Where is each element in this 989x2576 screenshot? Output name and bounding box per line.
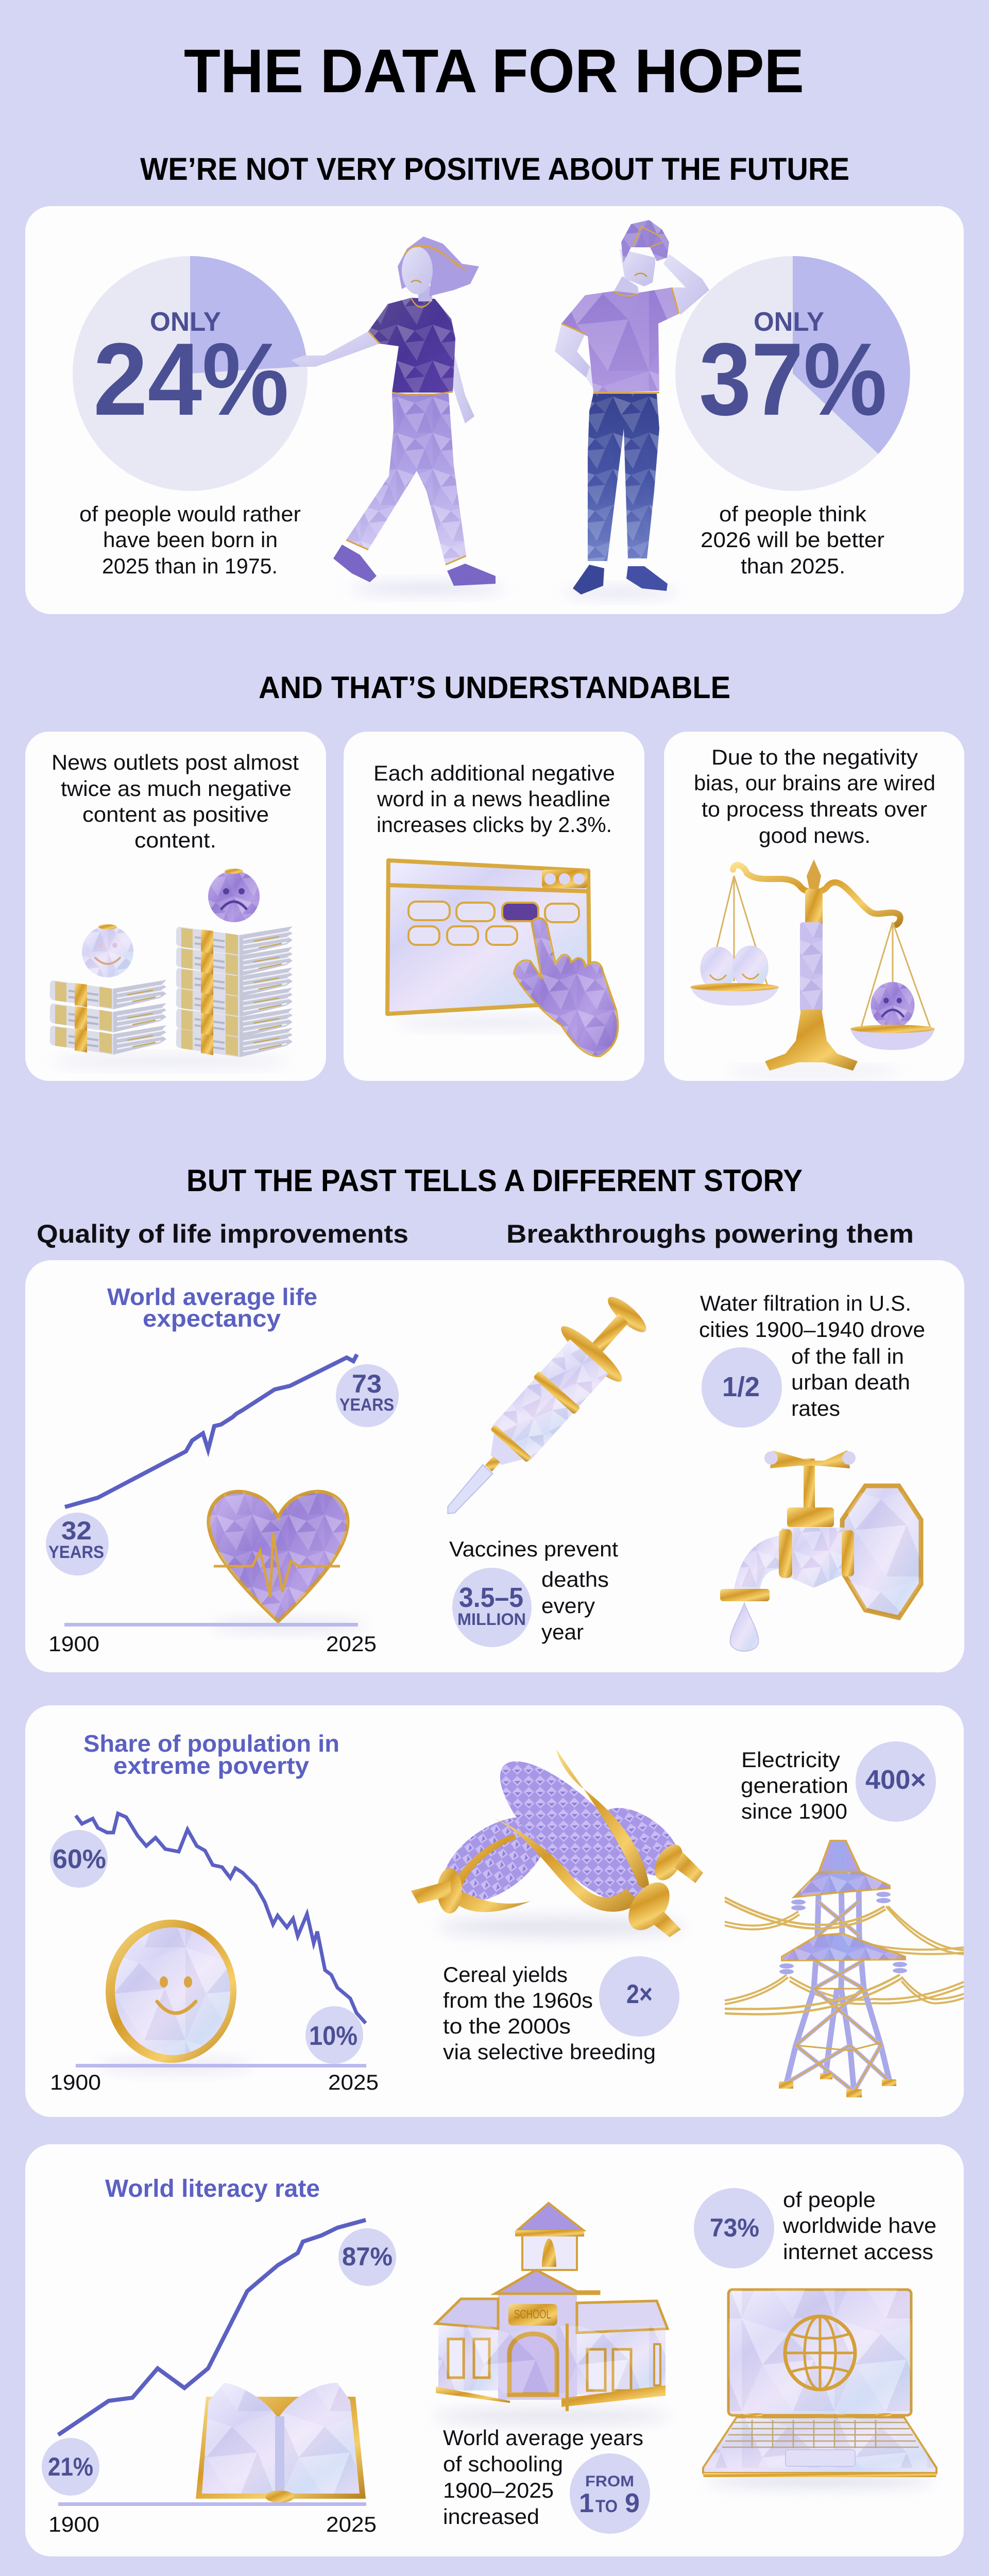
text: internet access [782, 2188, 936, 2264]
icon: crystal woman walking [291, 236, 505, 593]
panel: extreme poverty [25, 1705, 964, 2117]
bubble: 73 years [336, 1364, 399, 1427]
bubble: 87%: 87% [342, 2242, 393, 2271]
line chart: literacy: 1900 [48, 2512, 99, 2536]
text: headline clicks: Each additional negative [373, 761, 615, 785]
caption: 24%: 2025 than in 1975. [102, 554, 278, 578]
line chart: life expectancy [48, 1354, 377, 1656]
icon: balance scale [690, 859, 935, 1075]
chart title: World average life [107, 1283, 317, 1310]
bubble: from 1 to 9: 1 [579, 2488, 594, 2518]
bubble: 73 years: 73 [352, 1369, 382, 1398]
bubble: 400x: 400× [865, 1765, 926, 1795]
text: electricity: since 1900 [741, 1799, 847, 1823]
text: headline clicks [373, 761, 615, 837]
text: negativity bias: good news. [759, 823, 871, 848]
bubble: 21%: 21% [48, 2452, 93, 2481]
text: news outlets: twice as much negative [61, 776, 292, 801]
bubble: 2x: 2× [626, 1979, 653, 2009]
heading: not very positive: WE’RE NOT VERY POSITIVE ABOUT THE FUTURE [140, 151, 849, 187]
text: schooling: of schooling [443, 2452, 563, 2476]
panel: survey results [25, 206, 964, 614]
icon: book stacks with smiley gems [50, 869, 293, 1065]
line chart: literacy: 2025 [326, 2512, 377, 2536]
subheading: quality of life: Quality of life improvements [37, 1219, 408, 1248]
bubble: 1/2: 1/2 [722, 1371, 760, 1402]
text: water filtration: urban death [791, 1370, 910, 1394]
icon: crystal syringe [418, 1281, 662, 1540]
chart title: Share of population in [83, 1730, 339, 1757]
text: news outlets: content as positive [82, 802, 269, 826]
pie chart: 24%: ONLY [150, 307, 221, 337]
text: schooling [443, 2426, 643, 2529]
text: cereal yields: Cereal yields [443, 1962, 568, 1987]
text: electricity: Electricity [741, 1748, 840, 1772]
icon: browser window with hand cursor [387, 860, 618, 1056]
title: THE DATA FOR HOPE [184, 37, 804, 106]
panel: negativity bias [664, 732, 964, 1081]
icon: crystal man scratching head [555, 220, 709, 597]
bubble: 400x [856, 1741, 936, 1822]
chart title: World literacy rate [105, 2175, 320, 2202]
text: headline clicks: increases clicks by 2.3%. [377, 812, 612, 837]
caption: 24%: have been born in [103, 528, 278, 552]
text: negativity bias [694, 745, 935, 848]
bubble: 60%: 60% [53, 1844, 106, 1874]
bubble: 60% [50, 1830, 108, 1888]
pie chart: 24% [73, 256, 308, 491]
line chart: life expectancy: 1900 [48, 1632, 99, 1656]
text: vaccines [449, 1537, 618, 1644]
bubble: 1/2 [702, 1347, 782, 1428]
pie chart: 37%: 37% [699, 322, 887, 437]
text: headline clicks: word in a news headline [377, 787, 610, 811]
bubble: 87% [338, 2228, 396, 2286]
caption: 37%: than 2025. [741, 554, 845, 578]
icon: smiley coin [98, 1920, 252, 2071]
text: vaccines: deaths [541, 1567, 609, 1591]
text: internet access: internet access [783, 2240, 933, 2264]
text: water filtration: cities 1900–1940 drove [699, 1317, 925, 1342]
text: cereal yields: to the 2000s [443, 2014, 571, 2038]
bubble: 32 years: 32 [61, 1516, 92, 1545]
text: negativity bias: to process threats over [702, 797, 927, 821]
caption: 37%: 2026 will be better [701, 528, 884, 552]
text: vaccines: Vaccines prevent [449, 1537, 618, 1561]
chart title: extreme poverty [113, 1752, 309, 1779]
text: water filtration [699, 1291, 925, 1420]
panel: life expectancy [25, 1260, 964, 1672]
bubble: from 1 to 9: 9 [625, 2488, 640, 2518]
icon: crystal corn [411, 1741, 703, 1938]
caption: 37%: of people think [719, 502, 867, 526]
heading: different story: BUT THE PAST TELLS A DIFFERENT STORY [186, 1163, 803, 1198]
bubble: 3.5-5 million: 3.5–5 [459, 1582, 523, 1613]
icon: crystal power tower [725, 1841, 964, 2097]
bubble: 3.5-5 million [452, 1568, 532, 1647]
bubble: 21% [42, 2438, 99, 2496]
line chart: poverty: 2025 [328, 2070, 379, 2094]
text: internet access: worldwide have [782, 2213, 936, 2238]
icon: crystal faucet [720, 1450, 921, 1651]
panel: clicks [344, 732, 644, 1081]
icon: crystal laptop [703, 2290, 936, 2488]
bubble: 2x [599, 1956, 679, 2037]
text: cereal yields: from the 1960s [443, 1988, 593, 2012]
bubble: 3.5-5 million: MILLION [457, 1610, 526, 1629]
line chart: poverty: 1900 [50, 2070, 101, 2094]
bubble: 10%: 10% [309, 2021, 357, 2051]
caption: 37% [701, 502, 884, 578]
text: electricity: generation [741, 1773, 848, 1798]
subheading: breakthroughs: Breakthroughs powering them [506, 1219, 914, 1248]
bubble: 73 years: YEARS [339, 1395, 394, 1415]
text: negativity bias: Due to the negativity [711, 745, 918, 769]
text: cereal yields: via selective breeding [443, 2040, 656, 2064]
heading: understandable: AND THAT’S UNDERSTANDABLE [259, 670, 730, 705]
line chart: literacy [48, 2220, 377, 2536]
text: news outlets: News outlets post almost [52, 750, 299, 774]
text: water filtration: Water filtration in U.S. [700, 1291, 911, 1315]
bubble: 10% [305, 2006, 363, 2064]
bubble: 73% [694, 2188, 774, 2268]
bubble: from 1 to 9: FROM [585, 2473, 634, 2490]
text: schooling: 1900–2025 [443, 2478, 554, 2502]
chart title [83, 1730, 339, 1779]
text: news outlets: content. [134, 828, 216, 852]
text: cereal yields [443, 1962, 656, 2064]
chart title: expectancy [143, 1305, 281, 1332]
panel: negative content [25, 732, 326, 1081]
icon: crystal school house [433, 2203, 670, 2425]
pie chart: 24%: 24% [93, 322, 289, 437]
bubble: 32 years: YEARS [48, 1543, 104, 1562]
bubble: 73%: 73% [710, 2213, 759, 2242]
text: schooling: World average years [443, 2426, 643, 2450]
icon: open crystal book [196, 2383, 366, 2503]
text: vaccines: year [541, 1620, 584, 1644]
text: schooling: increased [443, 2504, 539, 2529]
caption: 24%: of people would rather [79, 502, 301, 526]
icon: crystal school house: SCHOOL [514, 2308, 551, 2321]
pie chart: 37%: ONLY [754, 307, 824, 337]
panel: literacy [25, 2144, 964, 2556]
icon: heart gem [209, 1492, 366, 1631]
pie chart: 37% [675, 256, 910, 491]
bubble: from 1 to 9 [570, 2453, 650, 2534]
text: water filtration: rates [791, 1396, 840, 1420]
bubble: from 1 to 9: TO [595, 2497, 618, 2516]
text: news outlets [52, 750, 299, 852]
text: negativity bias: bias, our brains are wired [694, 771, 935, 795]
text: water filtration: of the fall in [791, 1344, 904, 1368]
text: vaccines: every [541, 1594, 595, 1618]
line chart: life expectancy: 2025 [326, 1632, 377, 1656]
chart title [107, 1283, 317, 1332]
caption: 24% [79, 502, 301, 578]
bubble: 32 years [46, 1513, 109, 1575]
text: electricity [741, 1748, 848, 1823]
line chart: poverty [50, 1814, 379, 2094]
text: internet access: of people [783, 2188, 876, 2212]
